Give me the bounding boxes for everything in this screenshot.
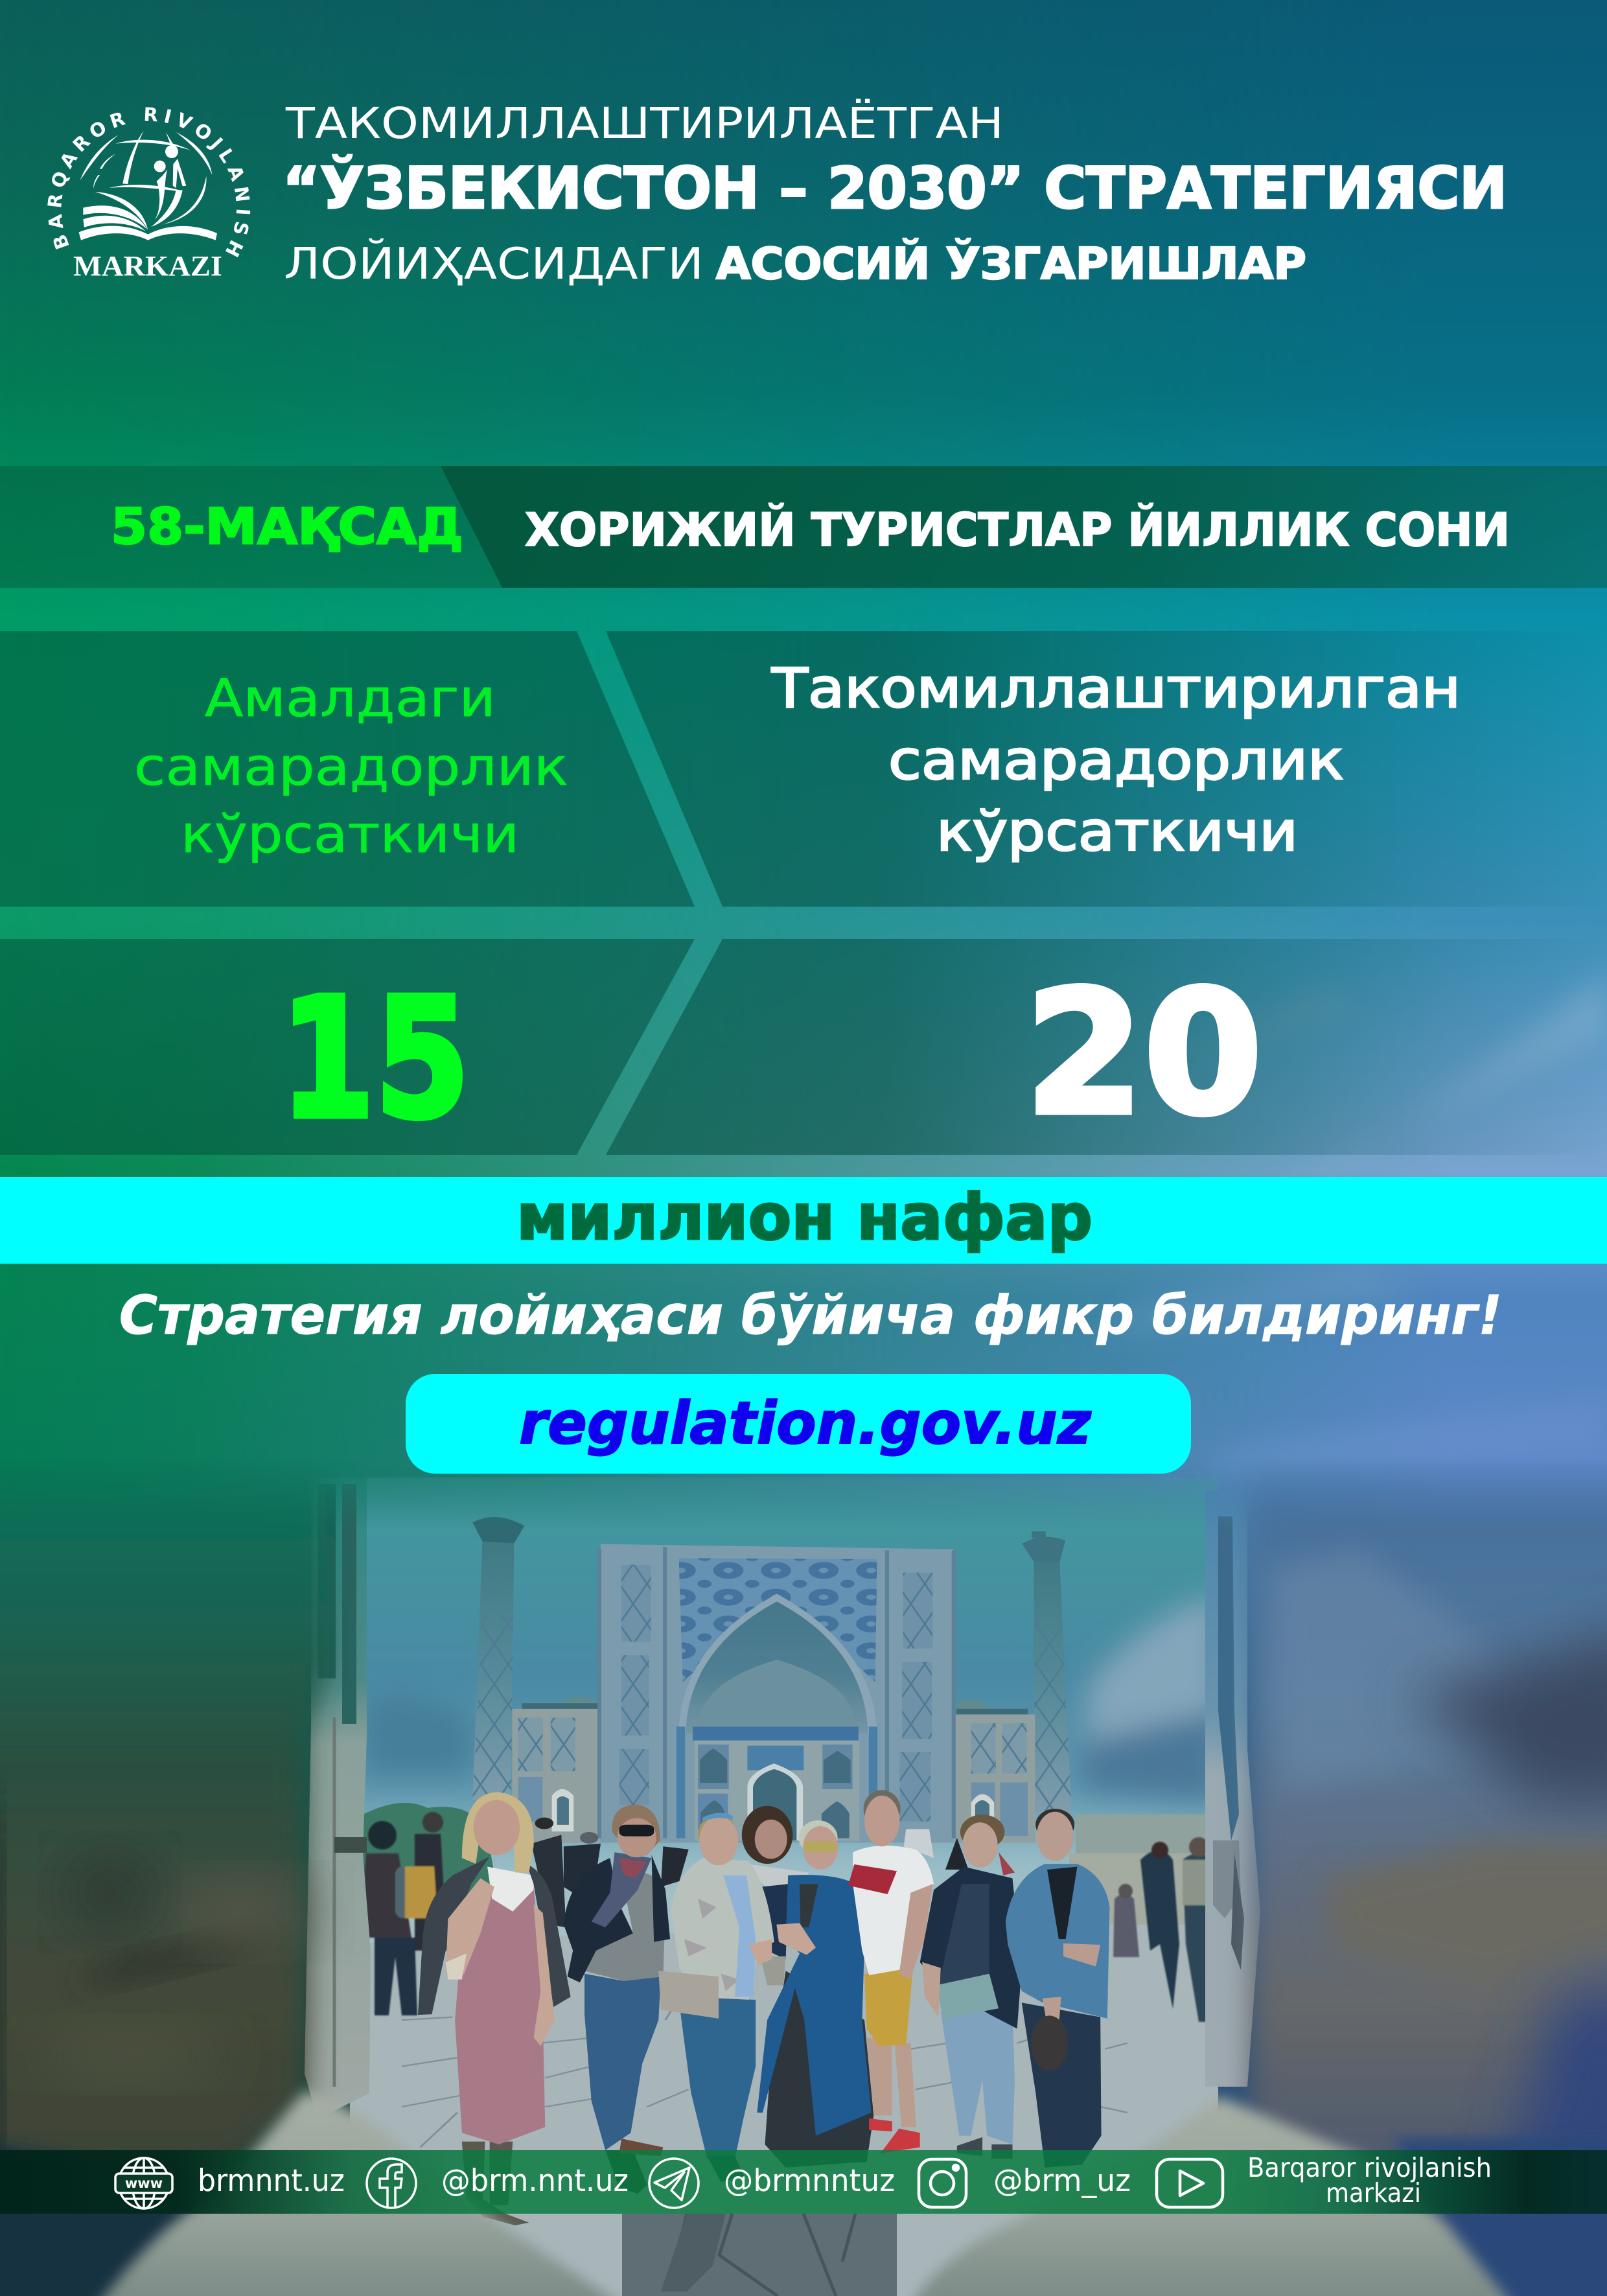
unit band [0, 1177, 1607, 1264]
person: woman behind group [742, 1806, 809, 1986]
text: current indicator label: кўрсаткичи [181, 804, 519, 864]
minaret right [1022, 1531, 1072, 1811]
person: woman in floral jacket [658, 1813, 774, 2182]
text: improved indicator label: самарадорлик [888, 728, 1344, 792]
madrasa building [472, 1517, 1072, 1842]
title line 3: ЛОЙИҲАСИДАГИ [284, 238, 704, 289]
text: goal number: 58-МАҚСАД [111, 498, 463, 556]
title line 2: “ЎЗБЕКИСТОН – 2030” СТРАТЕГИЯСИ [283, 155, 1507, 222]
trees [363, 1803, 494, 1895]
panel: current indicator heading [0, 631, 695, 907]
icon: instagram [919, 2159, 966, 2207]
person: woman with floral bag [920, 1815, 1022, 2159]
call to action: Стратегия лойиҳаси бўйича фикр билдиринг! [119, 1285, 1502, 1347]
logo ring text: BARQAROR [47, 113, 126, 249]
person: woman in pink dress [418, 1792, 571, 2225]
sky [350, 1478, 1218, 1944]
blurred foreground rock right [1251, 1426, 1607, 2242]
person: woman in sunglasses [564, 1805, 670, 2194]
foreground stone left [0, 2091, 625, 2296]
panel: improved indicator heading [606, 631, 1607, 907]
person: woman in long blue coat [757, 1820, 873, 2168]
title line 1: ТАКОМИЛЛАШТИРИЛАЁТГАН [285, 99, 1004, 148]
text: organisation name [1247, 2152, 1492, 2209]
tourists group [402, 1790, 1127, 2225]
top band: goal label [0, 466, 1607, 588]
icon: website globe [115, 2158, 172, 2209]
icon: website globe: www [125, 2175, 163, 2191]
text: current indicator label: Амалдаги [205, 668, 496, 728]
panel: improved value [606, 939, 1607, 1155]
logo ring text [47, 107, 250, 257]
text: improved indicator label: кўрсаткичи [936, 800, 1298, 863]
person: man in white t-shirt [848, 1790, 934, 2153]
title line 3: АСОСИЙ ЎЗГАРИШЛАР [716, 238, 1306, 289]
ground [350, 1853, 1218, 2296]
blurred foreground rock left [0, 1426, 330, 2242]
title [283, 99, 1507, 289]
text: improved indicator label [771, 656, 1461, 863]
panel: current value [0, 939, 695, 1155]
paving cracks [402, 1997, 1127, 2148]
text: instagram handle: @brm_uz [993, 2163, 1131, 2199]
text: organisation name: Barqaror rivojlanish [1247, 2152, 1492, 2183]
text: current indicator label [134, 668, 568, 864]
logo [47, 107, 250, 282]
icon: facebook [367, 2159, 416, 2208]
title line 3 [284, 238, 1306, 289]
text: organisation name: markazi [1326, 2177, 1421, 2209]
text: website: brmnnt.uz [198, 2163, 345, 2199]
left stone pillar [305, 1478, 371, 2119]
logo mark: book, globe and figures [79, 131, 217, 240]
right stone pillar [1205, 1490, 1260, 2087]
main portal [599, 1544, 954, 1842]
photo: Registan tourists [0, 1426, 1607, 2296]
footer contact bar [0, 2150, 1607, 2214]
number: 20: 20 [1025, 955, 1262, 1152]
left wing [512, 1697, 599, 1842]
minaret left [472, 1517, 524, 1800]
text: current indicator label: самарадорлик [134, 737, 568, 797]
text: unit: миллион нафар [516, 1181, 1093, 1255]
panel: indicator name [441, 466, 1607, 588]
logo ring text: RIVOJLANISH [145, 107, 250, 257]
text: link: regulation.gov.uz [519, 1389, 1092, 1457]
distant buildings right [1076, 1815, 1218, 1853]
text: indicator name: ХОРИЖИЙ ТУРИСТЛАР ЙИЛЛИК СОНИ [525, 504, 1510, 557]
foreground stone right [897, 2096, 1607, 2296]
panel: goal number [0, 466, 502, 588]
text: telegram handle: @brmnntuz [724, 2163, 895, 2199]
number: 15: 15 [280, 963, 470, 1155]
right wing [954, 1699, 1035, 1842]
logo wordmark: MARKAZI [73, 250, 222, 282]
crowd between figures [531, 1818, 1015, 1927]
text: improved indicator label: Такомиллаштирилган [771, 656, 1461, 720]
link button [406, 1374, 1191, 1474]
icon: telegram [649, 2159, 699, 2208]
person: man in denim jacket [1006, 1809, 1109, 2168]
icon: youtube [1157, 2159, 1223, 2207]
background crowd [360, 1812, 1218, 2022]
text: facebook handle: @brm.nnt.uz [441, 2163, 629, 2199]
